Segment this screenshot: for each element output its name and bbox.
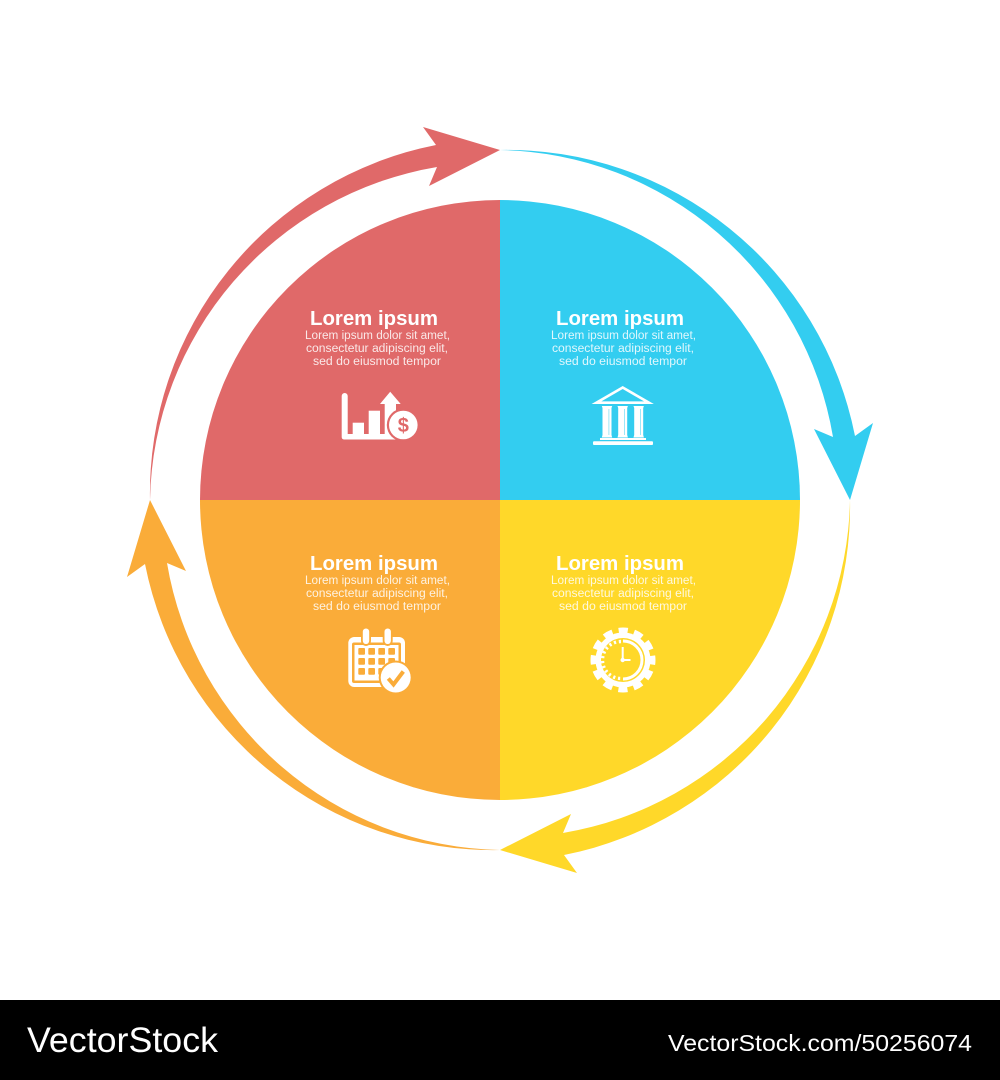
blue body text: Lorem ipsum dolor sit amet,	[551, 330, 696, 342]
panel: orange quadrant	[200, 500, 500, 800]
orange body text	[305, 575, 450, 613]
red body text	[305, 330, 450, 368]
orange body text: consectetur adipiscing elit,	[306, 588, 448, 600]
arrow: blue, top to right	[500, 150, 873, 500]
blue body text: sed do eiusmod tempor	[559, 356, 687, 368]
orange quadrant shape	[200, 500, 500, 800]
orange heading: Lorem ipsum	[310, 553, 438, 575]
red body text: Lorem ipsum dolor sit amet,	[305, 330, 450, 342]
orange body text: Lorem ipsum dolor sit amet,	[305, 575, 450, 587]
yellow heading: Lorem ipsum	[556, 553, 684, 575]
yellow body text: sed do eiusmod tempor	[559, 601, 687, 613]
blue body text	[551, 330, 696, 368]
arrow: yellow, right to bottom	[500, 500, 850, 873]
arrow: red, left to top	[150, 127, 500, 500]
icon: bar chart with dollar	[342, 392, 420, 442]
footer brand: VectorStock	[27, 1021, 219, 1060]
footer image id: VectorStock.com/50256074	[668, 1030, 972, 1056]
red body text: consectetur adipiscing elit,	[306, 343, 448, 355]
orange body text: sed do eiusmod tempor	[313, 601, 441, 613]
red quadrant shape	[200, 200, 500, 500]
icon: bar chart with dollar: $	[398, 415, 409, 437]
yellow body text	[551, 575, 696, 613]
yellow body text: consectetur adipiscing elit,	[552, 588, 694, 600]
yellow body text: Lorem ipsum dolor sit amet,	[551, 575, 696, 587]
icon: calendar with check	[348, 627, 413, 694]
panel: yellow quadrant	[500, 500, 800, 800]
panel: red quadrant	[200, 200, 500, 500]
arrow: orange, bottom to left	[127, 500, 500, 850]
icon: bank building	[593, 388, 653, 445]
yellow quadrant shape	[500, 500, 800, 800]
blue quadrant shape	[500, 200, 800, 500]
blue heading: Lorem ipsum	[556, 308, 684, 330]
icon: gear with clock	[594, 631, 652, 689]
footer bar	[0, 1000, 1000, 1080]
panel: blue quadrant	[500, 200, 800, 500]
red body text: sed do eiusmod tempor	[313, 356, 441, 368]
red heading: Lorem ipsum	[310, 308, 438, 330]
blue body text: consectetur adipiscing elit,	[552, 343, 694, 355]
